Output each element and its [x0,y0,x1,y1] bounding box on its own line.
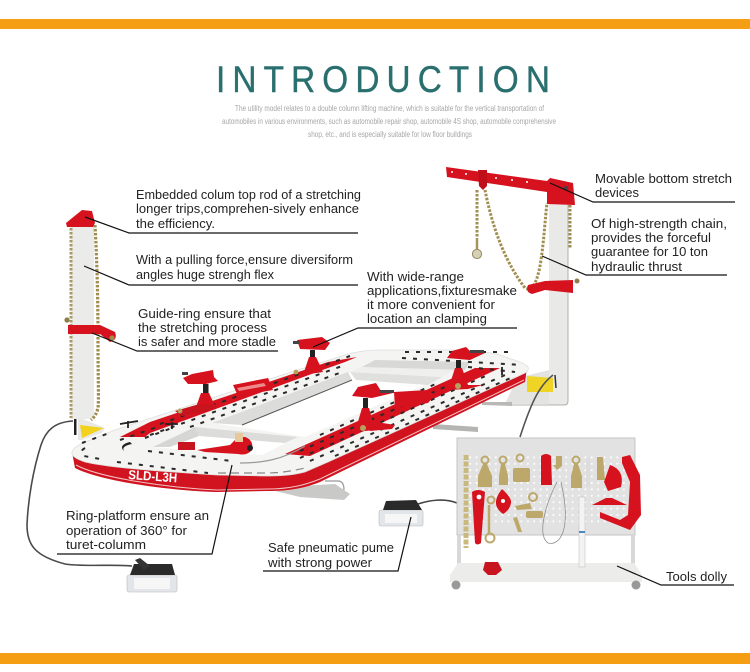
callout: movable bottom stretch: devices [595,186,639,200]
fixture tower D [447,347,485,390]
callout: embedded column rod: longer trips,comprehen-sively enhance [136,202,359,216]
callout: ring-platform: Ring-platform ensure an [66,509,209,523]
callout: high-strength chain [542,217,727,275]
callout: wide-range fixtures: applications,fixturesmake [367,284,517,298]
top orange bar [0,19,750,29]
platform top surface [72,350,528,476]
callout: embedded column rod [85,188,361,233]
callout: wide-range fixtures: it more convenient for [367,298,495,312]
callout: pulling force: angles huge strengh flex [136,268,275,282]
callout: embedded column rod: the efficiency. [136,217,215,231]
title: INTRODUCTION [216,59,550,100]
callout: pulling force [84,253,358,285]
callout: tools dolly [617,566,734,585]
left hydraulic hose [27,421,132,566]
callout: ring-platform: operation of 360° for [66,524,187,538]
callout: wide-range fixtures [313,270,517,347]
callout: pulling force: With a pulling force,ensure diversiform [136,253,353,267]
right pump [379,500,457,526]
callout: guide-ring: the stretching process [138,321,267,335]
callout: guide-ring: is safer and more stadle [138,335,276,349]
fixture tower C [352,383,395,432]
red tray left [233,378,273,396]
callout: movable bottom stretch [550,172,735,202]
callout: pneumatic pump: Safe pneumatic pume [268,541,394,555]
callout: wide-range fixtures: location an clamping [367,312,487,326]
fixture tower A [175,370,218,416]
callout: high-strength chain: provides the forceful [591,231,711,245]
callout: movable bottom stretch: Movable bottom stretch [595,172,732,186]
intro paragraph: The utility model relates to a double column lifting machine, which is suitable for the vertical transportation of [235,104,545,113]
model label SLD-L3H: SLD-L3H [128,467,178,485]
platform skid base [263,409,478,500]
callout: pneumatic pump [263,517,411,571]
callout: guide-ring: Guide-ring ensure that [138,307,272,321]
callout: guide-ring [92,307,278,351]
intro paragraph [222,104,556,139]
callout: tools dolly: Tools dolly [666,570,728,584]
left pump [127,558,177,592]
left column assembly [64,210,116,440]
callout: high-strength chain: hydraulic thrust [591,260,683,274]
bottom orange bar [0,653,750,664]
right hose [520,375,553,437]
platform red side band [72,368,527,492]
callout: wide-range fixtures: With wide-range [367,270,464,284]
fixture tower B [293,337,330,375]
platform band white pinstripe [76,380,524,490]
callout: high-strength chain: guarantee for 10 ton [591,245,708,259]
floor jack in platform opening [178,433,253,454]
intro paragraph: automobiles in various environments, such as automobile repair shop, automobile 4S shop, automobile comprehensive [222,117,556,126]
callout: ring-platform: turet-columm [66,538,146,552]
callout: ring-platform [57,465,232,554]
right column with red arm and chains [446,167,580,406]
tools dolly [450,438,642,590]
callout: high-strength chain: Of high-strength chain, [591,217,727,231]
callout: embedded column rod: Embedded colum top rod of a stretching [136,188,361,202]
red tray right [394,390,435,408]
callout: pneumatic pump: with strong power [267,556,372,570]
intro paragraph: shop, etc., and is especially suitable for low floor buildings [308,130,472,139]
